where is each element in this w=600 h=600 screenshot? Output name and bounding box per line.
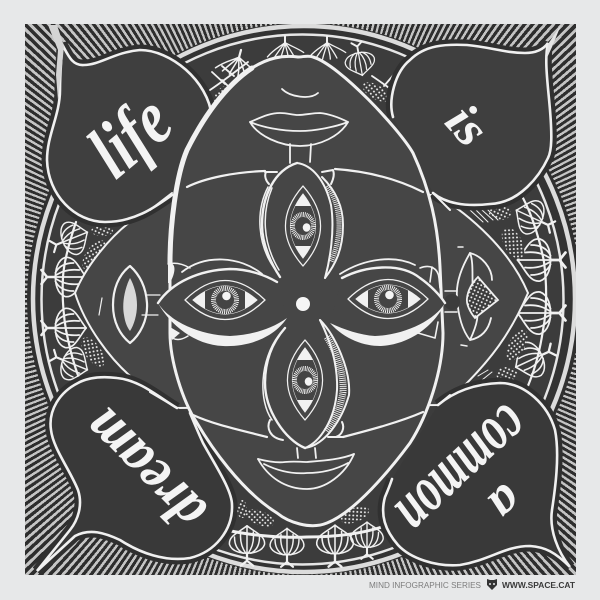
bottom mouth <box>258 448 354 489</box>
bottom petal <box>263 320 349 448</box>
speech bubble: common <box>383 383 570 567</box>
text: dream: dream <box>69 396 218 545</box>
inner ring <box>42 34 564 564</box>
thick left edge of face <box>170 68 252 263</box>
speech bubble: is <box>391 25 561 205</box>
website: WWW.SPACE.CAT <box>502 580 576 590</box>
speech bubble: life <box>47 25 212 222</box>
text: common: common <box>382 391 545 550</box>
series label: MIND INFOGRAPHIC SERIES <box>369 580 481 590</box>
footer <box>369 579 576 590</box>
ornament band left <box>41 216 113 386</box>
left mouth <box>99 266 160 343</box>
text: is: is <box>435 93 500 157</box>
bubble edge stubs <box>150 193 450 408</box>
right mouth <box>444 247 498 346</box>
ornament band top <box>209 35 393 102</box>
left petal <box>158 259 287 346</box>
horizontal diamond shape <box>75 195 528 408</box>
centre dot <box>296 297 310 311</box>
eye: top <box>285 186 321 266</box>
eye: right <box>348 279 428 319</box>
right petal <box>330 259 445 346</box>
top petal <box>260 163 343 278</box>
text: a: a <box>477 473 535 533</box>
face cross arcs <box>187 169 423 437</box>
top mouth <box>250 89 348 163</box>
vertical face shape <box>170 56 443 526</box>
ornament band right <box>470 194 566 388</box>
ornament band bottom <box>229 500 383 567</box>
eye: left <box>185 280 265 320</box>
text: life: life <box>72 78 188 194</box>
speech bubble: dream <box>37 377 232 571</box>
icon: cat logo <box>487 579 497 590</box>
eye: bottom <box>287 340 323 420</box>
